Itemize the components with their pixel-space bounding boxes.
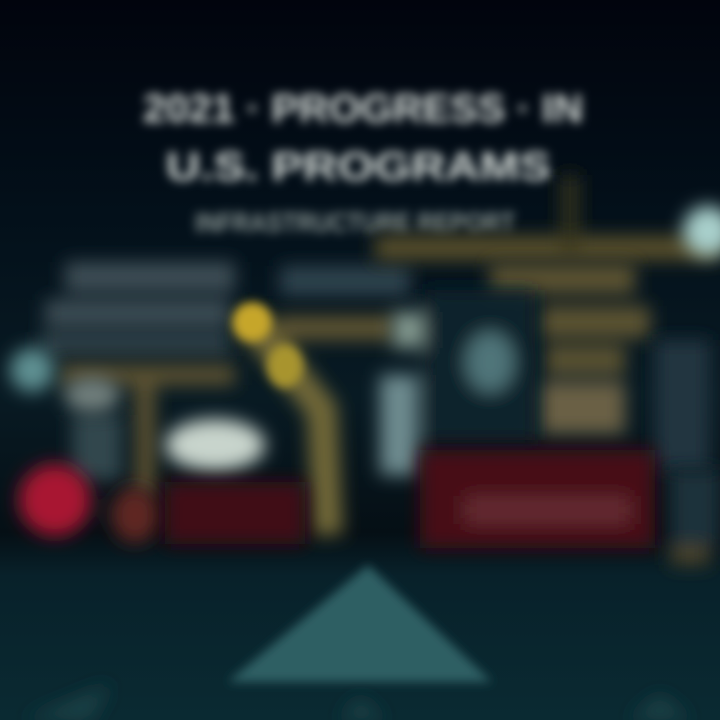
centre text panel bbox=[280, 266, 410, 296]
gold network lines bbox=[60, 175, 720, 535]
pale columns bbox=[72, 290, 710, 480]
gold node bbox=[232, 302, 303, 388]
dark red panel right bbox=[420, 450, 655, 548]
left text panel bbox=[40, 262, 235, 356]
pale glow nodes bbox=[10, 206, 720, 471]
right edge column bbox=[670, 470, 720, 565]
red circle bbox=[19, 464, 159, 543]
title: 2021 · PROGRESS · IN bbox=[143, 87, 583, 131]
dark red panel left bbox=[165, 482, 305, 544]
teal triangle bbox=[228, 565, 492, 682]
title bbox=[143, 87, 583, 189]
bottom markers bbox=[25, 685, 690, 720]
title: U.S. PROGRAMS bbox=[166, 145, 551, 189]
right gold text block bbox=[490, 264, 650, 434]
subtitle: INFRASTRUCTURE REPORT bbox=[195, 207, 515, 238]
